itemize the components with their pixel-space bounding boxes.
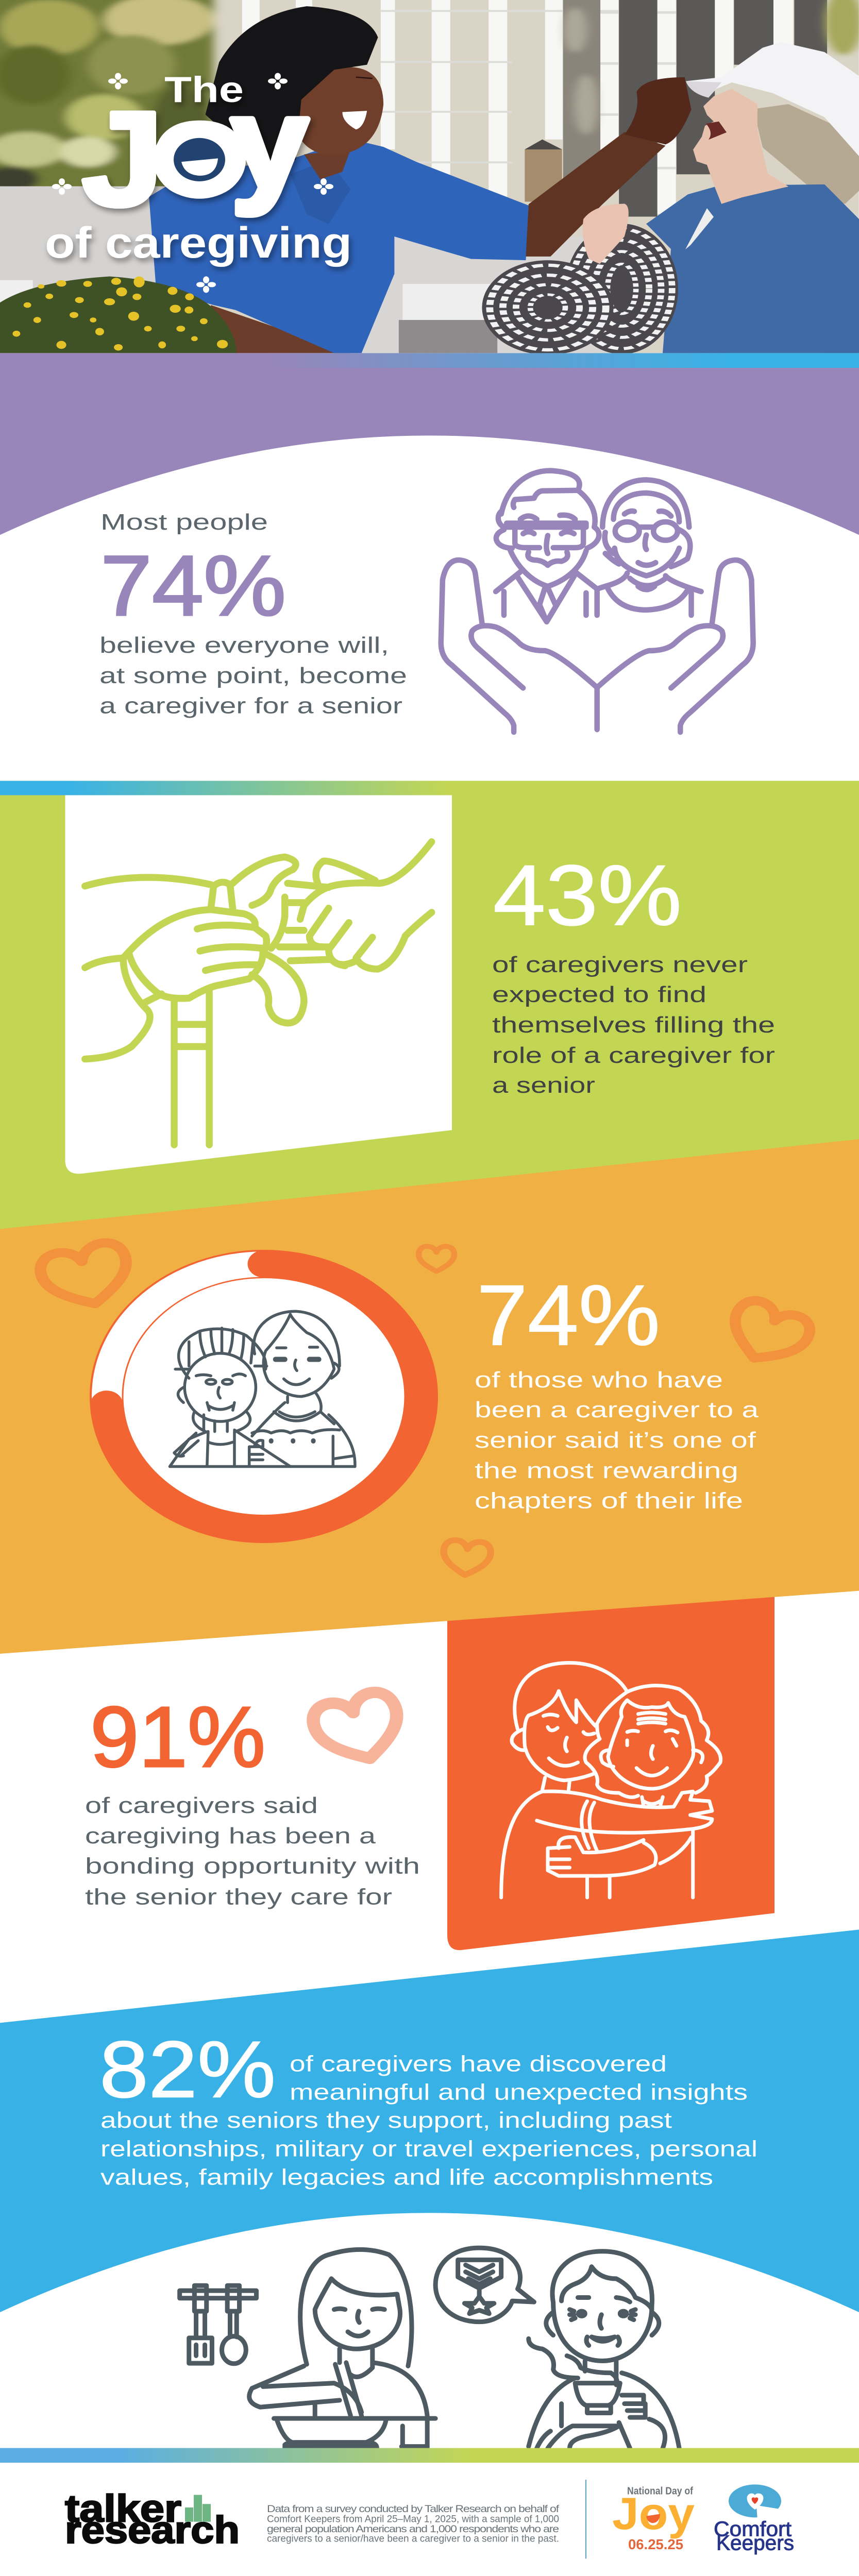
white hat bbox=[686, 42, 859, 156]
icon: senior with cup bbox=[529, 2251, 679, 2448]
face bbox=[693, 89, 788, 204]
logo ring bbox=[729, 2484, 783, 2520]
logo: National Day of Joy bbox=[612, 2485, 695, 2552]
text: most rewarding: the most rewarding bbox=[475, 1458, 738, 1483]
text: insights: relationships, military or travel experiences, personal bbox=[100, 2137, 757, 2162]
panel: 74% rewarding text bbox=[475, 1267, 759, 1514]
text: never expected: a senior bbox=[492, 1073, 595, 1098]
sofa bbox=[0, 187, 166, 289]
logo: Comfort Keepers bbox=[714, 2484, 794, 2555]
divider bbox=[585, 2480, 586, 2558]
stat: 82%: 82% bbox=[99, 2025, 276, 2114]
gradient band under hero bbox=[0, 353, 859, 368]
stat: 91%: 91% bbox=[90, 1689, 265, 1785]
text: most rewarding: been a caregiver to a bbox=[475, 1397, 759, 1422]
text: never expected: expected to find bbox=[492, 982, 706, 1007]
logo: talker research bbox=[65, 2487, 240, 2551]
text: never expected: of caregivers never bbox=[492, 952, 748, 977]
sparkles bbox=[52, 73, 333, 293]
hero photo: caregiver and senior laughing bbox=[0, 0, 859, 353]
text: believe everyone bbox=[99, 633, 407, 718]
footnote: Comfort Keepers from April 25–May 1, 2025, with a sample of 1,000 bbox=[267, 2513, 559, 2524]
footnote: general population Americans and 1,000 respondents who are bbox=[267, 2523, 559, 2535]
icon: hands on cane bbox=[85, 842, 432, 1145]
footnote bbox=[267, 2503, 559, 2544]
logo: talker research: talker bbox=[65, 2487, 181, 2530]
panel: orange section bbox=[0, 1139, 859, 1654]
title word: Joy: o bbox=[152, 76, 247, 221]
hair bbox=[757, 104, 859, 204]
text: insights bbox=[100, 2052, 757, 2190]
caregiver bbox=[149, 6, 692, 353]
icon: hands holding senior couple bbox=[441, 470, 753, 732]
icon: pink heart bbox=[308, 1688, 410, 1769]
text: most rewarding: chapters of their life bbox=[475, 1488, 743, 1514]
stat: 74%: 74% bbox=[100, 538, 286, 634]
icon: kitchen utensils bbox=[180, 2285, 256, 2364]
stat: 43%: 43% bbox=[493, 847, 682, 943]
patterned hat and hand bbox=[0, 204, 678, 355]
white card bbox=[65, 795, 452, 1174]
text: insights: meaningful and unexpected insights bbox=[290, 2079, 748, 2105]
text: believe everyone: at some point, become bbox=[99, 663, 407, 688]
title word: Joy: J bbox=[81, 83, 164, 234]
panel: green section bbox=[0, 781, 859, 1236]
gradient band above green section bbox=[0, 781, 859, 795]
text: believe everyone: believe everyone will, bbox=[99, 633, 389, 658]
panel: most people 74% bbox=[99, 510, 407, 718]
text: bonding opportunity: the senior they care for bbox=[85, 1884, 392, 1910]
logo: National Day of Joy: National Day of bbox=[627, 2485, 693, 2497]
flowers bbox=[0, 276, 237, 353]
gradient band above footer bbox=[0, 2448, 859, 2463]
text: believe everyone: a caregiver for a senior bbox=[99, 693, 402, 718]
senior woman bbox=[646, 42, 859, 353]
title word: Joy bbox=[81, 70, 309, 234]
text: bonding opportunity: of caregivers said bbox=[85, 1793, 318, 1818]
logo bars bbox=[185, 2495, 211, 2522]
panel: purple arc bbox=[0, 368, 859, 535]
text: insights: of caregivers have discovered bbox=[290, 2052, 667, 2077]
text: never expected bbox=[492, 952, 775, 1098]
panel: 43% text bbox=[492, 847, 775, 1098]
icon: embrace bbox=[501, 1663, 721, 1897]
footnote: caregivers to a senior/have been a caregiver to a senior in the past. bbox=[267, 2533, 559, 2544]
panel: 91% text bbox=[85, 1688, 420, 1910]
title line: of caregiving: of caregiving bbox=[45, 218, 352, 267]
logo: National Day of Joy: Joy bbox=[612, 2488, 695, 2539]
text: bonding opportunity: caregiving has been a bbox=[85, 1823, 376, 1849]
text: insights: about the seniors they support, including past bbox=[100, 2108, 672, 2133]
logo: Comfort Keepers: Comfort bbox=[714, 2518, 791, 2541]
lantern bbox=[525, 149, 562, 201]
joy smile bbox=[174, 138, 225, 181]
text: most rewarding: of those who have bbox=[475, 1367, 723, 1393]
donut chart: 74% bbox=[91, 1251, 437, 1542]
panel: 82% text bbox=[99, 2025, 757, 2190]
title word: The: The bbox=[164, 70, 244, 110]
foliage bbox=[0, 0, 859, 192]
logo: Comfort Keepers: Keepers bbox=[716, 2532, 794, 2555]
logo: National Day of Joy: 06.25.25 bbox=[628, 2536, 683, 2552]
white shirt bbox=[685, 208, 714, 249]
text: most people: Most people bbox=[100, 510, 268, 535]
text: never expected: themselves filling the bbox=[492, 1012, 775, 1038]
text: insights: values, family legacies and life accomplishments bbox=[100, 2164, 713, 2190]
text: never expected: role of a caregiver for bbox=[492, 1043, 775, 1068]
text: bonding opportunity: bonding opportunity with bbox=[85, 1854, 420, 1879]
logo: talker research: research bbox=[65, 2509, 240, 2551]
white footer bbox=[0, 2463, 859, 2576]
jacket bbox=[646, 184, 859, 353]
footnote: Data from a survey conducted by Talker Research on behalf of bbox=[267, 2503, 559, 2515]
pillows bbox=[402, 284, 491, 320]
text: most rewarding: senior said it’s one of bbox=[475, 1428, 756, 1453]
text: bonding opportunity bbox=[85, 1793, 420, 1910]
title word: Joy: y bbox=[231, 70, 309, 216]
icon: senior and younger woman bbox=[170, 1311, 355, 1466]
panel: blue section bbox=[0, 1929, 859, 2312]
icon: woman cooking bbox=[249, 2249, 435, 2448]
hearts: decorative outlines bbox=[36, 1239, 816, 1577]
hero title: The Joy of caregiving bbox=[45, 70, 352, 267]
stat: 74%: 74% bbox=[477, 1267, 660, 1363]
text: most rewarding bbox=[475, 1367, 759, 1514]
icon: speech bubble with military medal bbox=[435, 2248, 534, 2322]
orange-red card: hug bbox=[447, 1562, 774, 1950]
